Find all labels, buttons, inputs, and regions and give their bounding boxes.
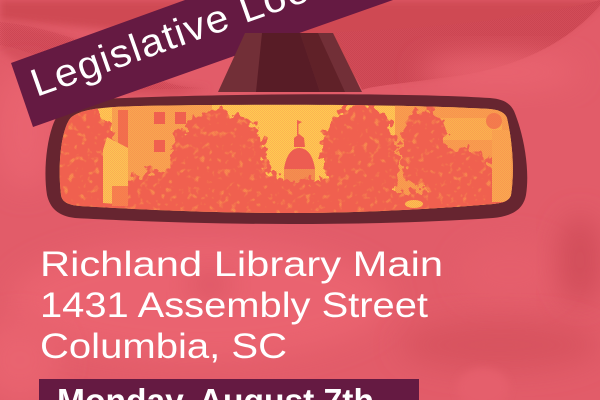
address line 1: Richland Library Main xyxy=(40,245,443,284)
mirror frame xyxy=(45,94,527,224)
banner xyxy=(11,0,423,127)
rearview mirror xyxy=(45,94,527,224)
left building xyxy=(112,105,212,181)
small sun patch xyxy=(405,200,423,208)
address xyxy=(40,245,443,366)
left building face xyxy=(103,137,128,205)
address line 2: 1431 Assembly Street xyxy=(40,286,428,325)
mirror glass scene xyxy=(60,104,513,213)
sky xyxy=(60,104,513,213)
address line 3: Columbia, SC xyxy=(40,327,287,366)
capitol dome xyxy=(284,120,315,187)
mirror mount xyxy=(218,33,362,92)
tower cap on the right xyxy=(486,113,502,129)
date bar xyxy=(39,379,419,400)
trees xyxy=(60,105,510,213)
right building xyxy=(395,104,515,209)
